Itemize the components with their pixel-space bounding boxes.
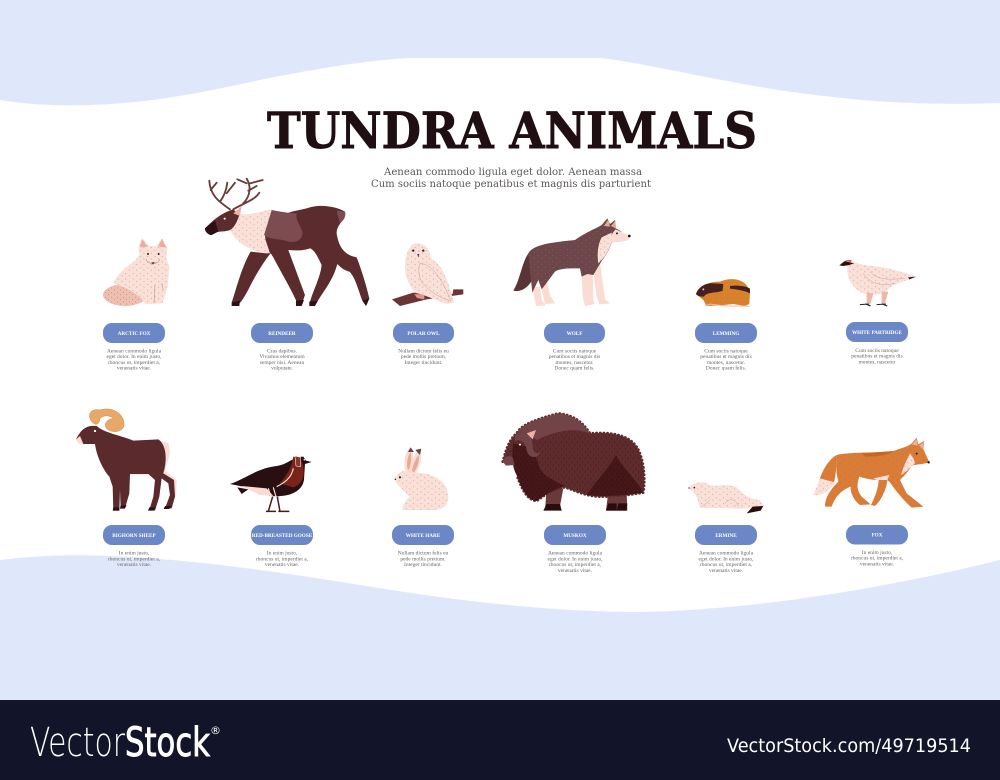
card: polar owl: Nullam dictum felis eu — [398, 348, 449, 354]
card: red-breasted goose — [251, 525, 313, 568]
card: arctic fox: Aenean commodo ligula — [107, 348, 162, 354]
card: ermine: eget dolor. In enim justo, — [698, 556, 754, 562]
card: lemming: Donec quam felis. — [706, 365, 747, 372]
card: reindeer: REINDEER — [268, 331, 296, 337]
antlers — [209, 179, 263, 209]
card: fox — [846, 525, 908, 567]
card: white partridge: Cum sociis natoque — [855, 348, 899, 354]
card: wolf: montes, nascetur. — [555, 360, 594, 366]
card: red-breasted goose: venenatis vitae. — [265, 562, 300, 568]
card: reindeer: Cras dapibus. — [267, 348, 298, 354]
card: lemming: Cum sociis natoque — [704, 348, 748, 354]
card: ermine: venenatis vitae. — [709, 568, 744, 574]
title: TUNDRA ANIMALS — [267, 101, 757, 160]
card: polar owl: POLAR OWL — [407, 331, 440, 337]
card: polar owl — [393, 323, 454, 366]
card: polar owl: Integer tincidunt. — [405, 360, 443, 366]
card: white hare: pede mollis pretium. — [400, 556, 446, 562]
subtitle: Aenean commodo ligula eget dolor. Aenean massa — [383, 166, 642, 178]
card: white hare — [392, 525, 454, 568]
card: white partridge: penatibus et magnis dis — [851, 354, 903, 360]
card: fox: rhoncus ut, imperdiet a, — [851, 556, 904, 562]
card: arctic fox: venenatis vitae. — [117, 366, 152, 372]
card: arctic fox: rhoncus ut, imperdiet a, — [108, 360, 161, 366]
subtitle — [371, 166, 652, 190]
icon: reindeer — [205, 179, 369, 306]
card: white hare: Nullam dictum felis eu — [398, 550, 449, 557]
top wave — [0, 0, 1000, 105]
bottom wave — [0, 555, 1000, 700]
card: reindeer: semper nisi. Aenean — [260, 360, 304, 366]
card: fox: venenatis vitae. — [860, 561, 895, 567]
footer logo — [30, 720, 221, 766]
card: ermine: rhoncus ut, imperdiet a, — [700, 562, 753, 568]
card: reindeer: Vivamus elementum — [259, 354, 305, 360]
card: ermine: Aenean commodo ligula — [699, 551, 754, 557]
card: white hare: WHITE HARE — [406, 533, 441, 539]
card: muskox: Aenean commodo ligula — [548, 551, 603, 557]
card: arctic fox: eget dolor. In enim justo, — [106, 354, 162, 360]
card: muskox: MUSKOX — [563, 533, 587, 539]
card: white partridge: WHITE PARTRIDGE — [852, 330, 903, 336]
card: muskox: eget dolor. In enim justo, — [548, 556, 603, 562]
card: red-breasted goose: In enim justo, — [267, 551, 298, 557]
card: polar owl: pede mollis pretium. — [401, 354, 447, 360]
footer logo: ® — [210, 724, 221, 737]
icon: polar owl — [392, 243, 463, 306]
card: bighorn sheep: rhoncus ut, imperdiet a, — [108, 556, 161, 562]
icon: wolf — [513, 218, 631, 306]
card: wolf: penatibus et magnis dis — [549, 354, 600, 360]
icon: arctic fox — [103, 238, 169, 306]
card: ermine: ERMINE — [715, 533, 737, 539]
card: arctic fox — [103, 323, 165, 372]
card: white hare: Integer tincidunt. — [404, 562, 443, 568]
card: white partridge: montes, nascetur — [859, 359, 896, 365]
card: ermine — [695, 525, 757, 574]
card: lemming: LEMMING — [713, 331, 739, 337]
card: muskox — [544, 525, 606, 574]
icon: bighorn sheep — [76, 409, 177, 511]
card: lemming: montes, nascetur. — [707, 360, 746, 366]
card: muskox: rhoncus ut, imperdiet a, — [549, 562, 602, 568]
icon: fox — [813, 438, 930, 508]
card: wolf — [544, 323, 605, 372]
footer logo: Stock — [125, 720, 211, 766]
card: red-breasted goose: RED-BREASTED GOOSE — [252, 533, 313, 539]
card: bighorn sheep: In enim justo, — [119, 551, 150, 557]
card: lemming — [695, 323, 757, 372]
footer logo: Vector — [30, 720, 125, 766]
subtitle: Cum sociis natoque penatibus et magnis dis parturient — [371, 178, 652, 190]
card: reindeer — [251, 323, 313, 372]
footer image id: VectorStock.com/49719514 — [727, 735, 971, 757]
card: muskox: venenatis vitae. — [558, 568, 593, 574]
card: wolf: WOLF — [567, 331, 582, 337]
card: bighorn sheep: venenatis vitae. — [117, 562, 152, 568]
icon: white hare — [395, 447, 448, 510]
card: wolf: Cum sociis natoque — [553, 348, 597, 354]
card: reindeer: vulputate. — [271, 366, 294, 372]
icon: muskox — [503, 413, 644, 511]
card: bighorn sheep — [103, 525, 165, 568]
icon: red-breasted goose — [230, 456, 312, 511]
card: bighorn sheep: BIGHORN SHEEP — [112, 533, 157, 539]
icon: lemming — [696, 279, 750, 307]
footer bar — [0, 700, 1000, 780]
card: white partridge — [846, 322, 908, 365]
card: fox: FOX — [872, 532, 883, 538]
card: fox: In enim justo, — [862, 550, 893, 556]
icon: white partridge — [839, 260, 916, 306]
card: lemming: penatibus et magnis dis — [700, 354, 752, 360]
card: red-breasted goose: rhoncus ut, imperdiet a, — [256, 556, 309, 562]
card: wolf: Donec quam felis. — [554, 365, 595, 372]
card: arctic fox: ARCTIC FOX — [118, 331, 151, 337]
icon: ermine — [688, 482, 764, 514]
